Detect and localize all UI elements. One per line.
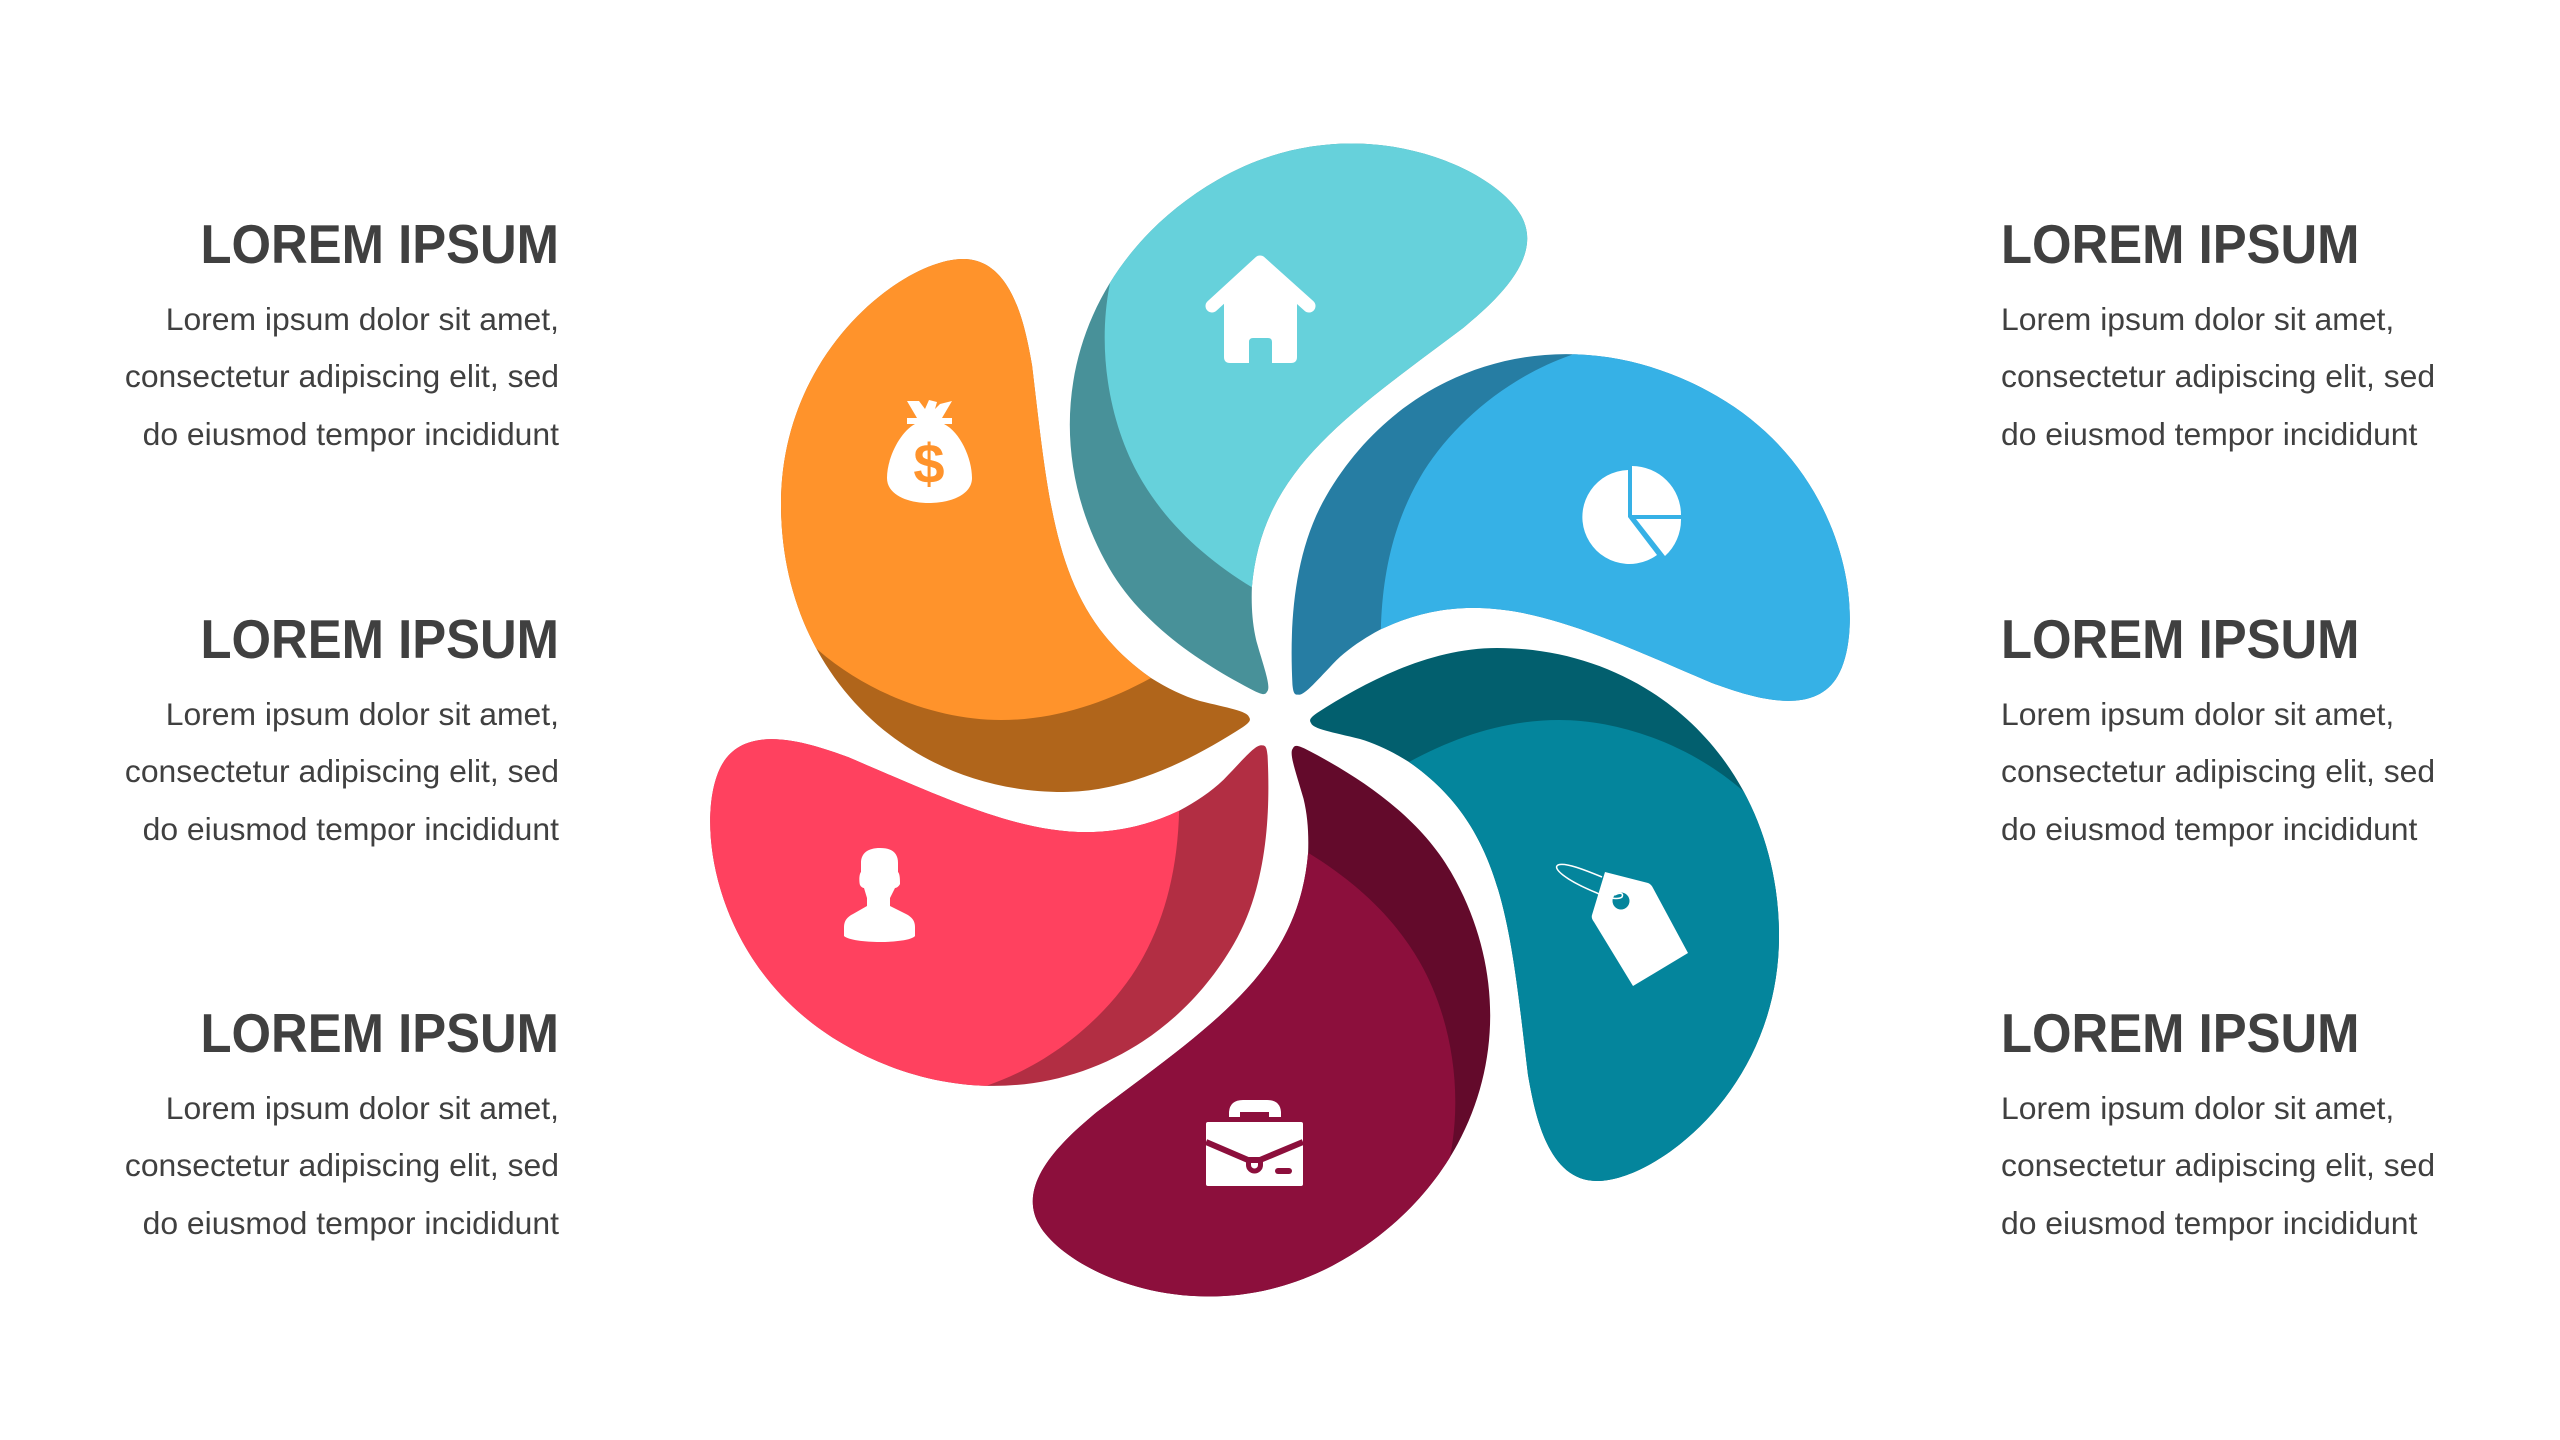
body text: Lorem ipsum dolor sit amet, (166, 696, 559, 732)
icon: pie chart (1582, 466, 1681, 564)
petal: maroon (1032, 746, 1490, 1296)
body text: do eiusmod tempor incididunt (143, 811, 559, 847)
body text: consectetur adipiscing elit, sed (2001, 1147, 2435, 1183)
body text: Lorem ipsum dolor sit amet, (2001, 696, 2394, 732)
petal: light teal (1070, 144, 1528, 694)
heading: LOREM IPSUM (200, 1002, 559, 1064)
text block: left bottom (125, 1002, 559, 1241)
heading: LOREM IPSUM (200, 608, 559, 670)
body text: consectetur adipiscing elit, sed (2001, 358, 2435, 394)
icon: house (1212, 262, 1309, 363)
body text: do eiusmod tempor incididunt (2001, 416, 2418, 452)
body text: consectetur adipiscing elit, sed (125, 753, 559, 789)
petal: deep teal (1310, 648, 1779, 1181)
text block: right top (2001, 213, 2435, 452)
icon: money bag: $ (913, 432, 945, 495)
heading: LOREM IPSUM (2001, 1002, 2360, 1064)
heading: LOREM IPSUM (2001, 608, 2360, 670)
icon: price tag (1557, 864, 1688, 986)
body text: consectetur adipiscing elit, sed (2001, 753, 2435, 789)
body text: do eiusmod tempor incididunt (2001, 811, 2418, 847)
text block: left middle (125, 608, 559, 847)
petal: coral red (710, 739, 1268, 1086)
text block: right middle (2001, 608, 2435, 847)
heading: LOREM IPSUM (200, 213, 559, 275)
petal: orange (781, 259, 1250, 792)
body text: consectetur adipiscing elit, sed (125, 358, 559, 394)
petal group: pinwheel (710, 144, 1850, 1296)
body text: Lorem ipsum dolor sit amet, (166, 301, 559, 337)
icon: person (844, 848, 915, 942)
body text: do eiusmod tempor incididunt (143, 416, 559, 452)
body text: do eiusmod tempor incididunt (2001, 1205, 2418, 1241)
body text: do eiusmod tempor incididunt (143, 1205, 559, 1241)
text block: right bottom (2001, 1002, 2435, 1241)
body text: Lorem ipsum dolor sit amet, (2001, 301, 2394, 337)
heading: LOREM IPSUM (2001, 213, 2360, 275)
icon: briefcase (1206, 1100, 1303, 1186)
text block: left top (125, 213, 559, 452)
body text: Lorem ipsum dolor sit amet, (2001, 1090, 2394, 1126)
body text: Lorem ipsum dolor sit amet, (166, 1090, 559, 1126)
petal: sky blue (1292, 354, 1850, 701)
body text: consectetur adipiscing elit, sed (125, 1147, 559, 1183)
icon: money bag (887, 400, 972, 503)
